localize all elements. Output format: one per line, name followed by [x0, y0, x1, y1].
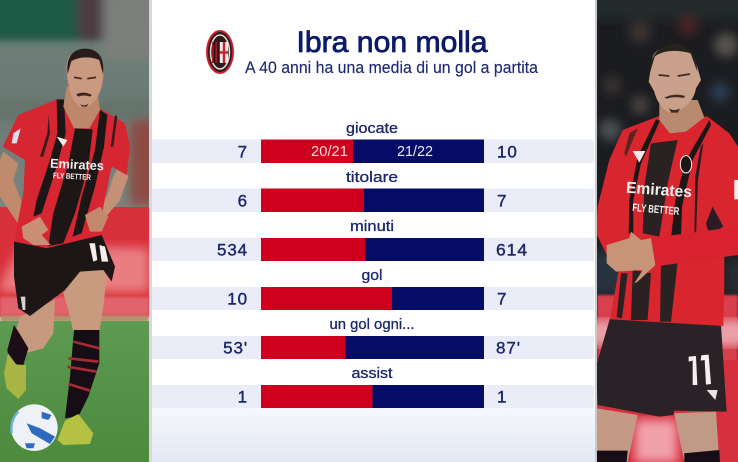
row: giocate: 21/22	[397, 143, 433, 160]
row: un gol ogni	[152, 316, 594, 359]
neck and head	[63, 87, 100, 128]
row: giocate: giocate	[346, 120, 398, 137]
row: titolare: titolare	[346, 169, 398, 186]
row: minuti	[152, 218, 594, 261]
shirt sponsor text: FLY BETTER	[53, 171, 91, 182]
shirt sponsor text: Emirates	[50, 156, 104, 173]
hands	[607, 232, 655, 283]
neck and head	[659, 100, 704, 133]
row: assist: 1	[238, 388, 248, 406]
row: giocate	[152, 120, 594, 163]
row: un gol ogni: un gol ogni...	[330, 316, 414, 333]
forearm	[660, 229, 738, 266]
right photo: player standing with hands together	[587, 0, 738, 462]
row: gol: 10	[227, 290, 248, 308]
row: gol: 7	[497, 290, 507, 308]
front leg	[63, 267, 107, 332]
AC Milan crest	[206, 30, 234, 74]
row: giocate: 7	[238, 142, 248, 162]
crest	[680, 156, 692, 173]
shorts	[596, 318, 727, 417]
row: gol	[152, 267, 594, 310]
shirt	[3, 99, 130, 248]
shorts	[14, 235, 115, 316]
arms	[0, 152, 40, 240]
row: un gol ogni: 87'	[496, 338, 521, 358]
central white panel	[149, 0, 597, 462]
row: titolare: 7	[497, 192, 507, 210]
back leg and boot	[16, 300, 55, 353]
row: assist: 1	[497, 388, 507, 406]
row: gol: gol	[362, 267, 382, 284]
ball	[11, 404, 58, 451]
shirt	[596, 116, 738, 326]
row: giocate: 20/21	[311, 143, 348, 160]
shirt sponsor text	[50, 158, 104, 180]
row: un gol ogni: 53'	[223, 338, 248, 358]
row: titolare	[152, 169, 594, 212]
shirt sponsor text	[626, 182, 692, 215]
row: minuti: 614	[496, 240, 528, 260]
hands	[22, 217, 51, 245]
logo on chest	[633, 151, 645, 163]
subtitle: A 40 anni ha una media di un gol a partita	[245, 59, 539, 77]
shirt sponsor text: FLY BETTER	[632, 202, 680, 218]
row: minuti: minuti	[350, 218, 394, 235]
left photo: player running with the ball	[0, 0, 159, 462]
title: Ibra non molla	[296, 26, 488, 59]
row: minuti: 534	[217, 240, 248, 260]
legs	[596, 408, 638, 462]
row: titolare: 6	[238, 192, 248, 210]
shirt sponsor text: Emirates	[625, 180, 693, 201]
row: assist: assist	[352, 365, 393, 382]
row: assist	[152, 365, 594, 408]
row: giocate: 10	[497, 142, 518, 162]
